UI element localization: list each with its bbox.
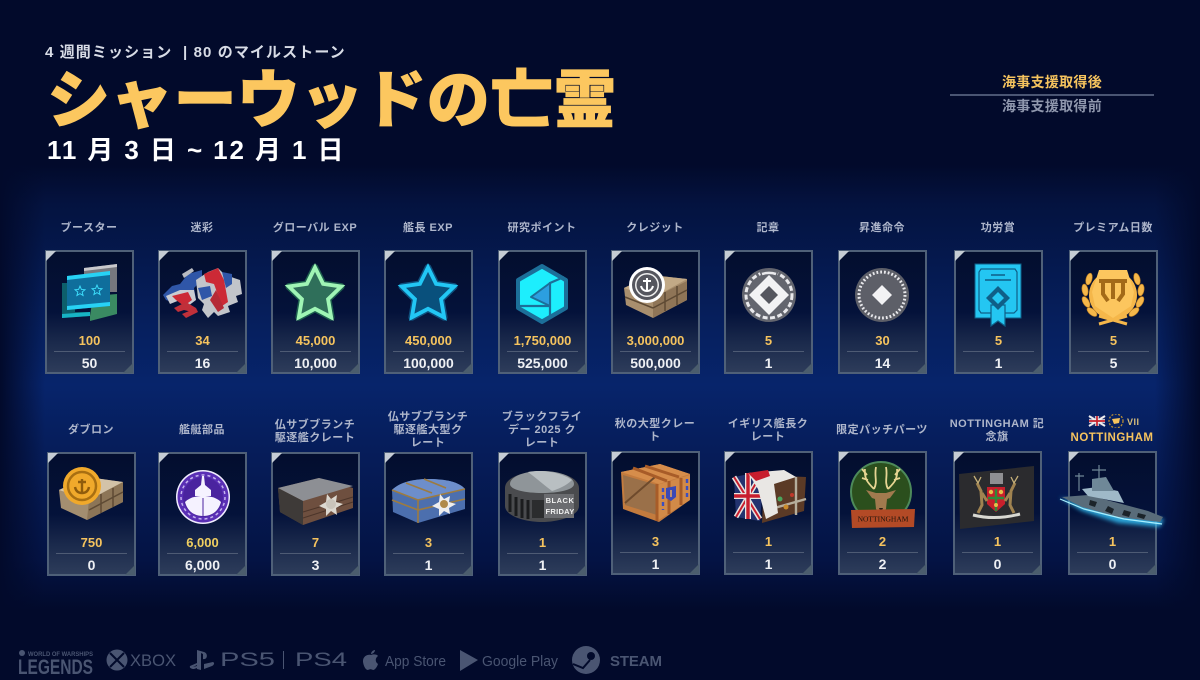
card <box>498 250 587 374</box>
before value: 1 <box>765 556 772 572</box>
label: ト <box>649 431 661 443</box>
before value: 1 <box>425 557 432 573</box>
logo: app store <box>363 650 446 670</box>
dates: 11 月 3 日 ~ 12 月 1 日 <box>47 135 345 165</box>
header block <box>45 44 617 165</box>
label: イギリス艦長ク <box>728 418 808 430</box>
icon: promotion order <box>855 268 909 322</box>
title: シャーウッドの亡霊 <box>47 66 617 136</box>
label <box>274 418 355 444</box>
label: 艦長 EXP <box>403 222 453 234</box>
after value: 1 <box>994 534 1001 549</box>
before value: 3 <box>312 557 319 573</box>
after value: 6,000 <box>186 535 219 550</box>
label: 限定パッチパーツ <box>836 424 928 436</box>
after value: 3 <box>425 535 432 550</box>
icon: blue chest <box>392 478 466 523</box>
nation and tier line: VII <box>1127 417 1140 427</box>
icon: laurel medal <box>742 268 796 322</box>
icon: black friday drum <box>505 471 579 522</box>
label: レート <box>411 437 445 449</box>
reward: limited patch parts <box>826 405 938 577</box>
logo: ps5 and ps4: PS4 <box>295 650 348 671</box>
reward: credits <box>611 222 700 374</box>
label <box>708 418 828 444</box>
legend <box>950 74 1154 114</box>
reward: nottingham commemorative flag <box>941 405 1053 577</box>
ship title block <box>1052 414 1172 448</box>
before value: 2 <box>879 556 886 572</box>
card <box>1069 250 1158 374</box>
icon: research hexagon <box>516 264 568 324</box>
label: クレジット <box>626 222 684 234</box>
card <box>954 250 1043 374</box>
logo: app store: App Store <box>385 653 446 670</box>
card <box>384 452 473 576</box>
reward: doubloons <box>47 423 136 576</box>
card <box>384 250 473 374</box>
logo: xbox <box>106 650 176 670</box>
icon: green star <box>284 263 346 321</box>
platform logos footer <box>0 640 680 680</box>
label: 駆逐艦クレート <box>275 432 355 444</box>
card <box>611 451 700 575</box>
label <box>615 418 695 443</box>
nation and tier line <box>1052 414 1172 428</box>
icon: nottingham flag <box>953 451 1041 575</box>
after value: 1,750,000 <box>514 333 571 348</box>
before value: 0 <box>88 557 95 573</box>
icon: gold laurel emblem <box>1082 270 1144 326</box>
logo: legends <box>18 650 94 679</box>
label: ダブロン <box>68 424 114 436</box>
label: 仏サブブランチ <box>275 419 355 431</box>
before value: 0 <box>994 556 1001 572</box>
reward: autumn large crate <box>611 418 700 575</box>
logo: legends: LEGENDS <box>18 656 93 679</box>
label: 迷彩 <box>190 222 214 234</box>
legend: after maritime support: 海事支援取得後 <box>1002 74 1102 90</box>
logo: xbox: XBOX <box>130 651 176 670</box>
reward: french destroyer large crate <box>384 410 473 576</box>
before value: 14 <box>875 355 890 371</box>
card <box>724 451 813 575</box>
after value: 750 <box>81 535 102 550</box>
before value: 10,000 <box>294 355 337 371</box>
icon: credit crate <box>624 267 688 318</box>
label: 駆逐艦大型ク <box>394 424 462 436</box>
reward: research points <box>498 222 587 374</box>
label: 昇進命令 <box>859 222 905 234</box>
reward: british commander crate <box>724 418 813 575</box>
reward: camouflage <box>158 222 247 374</box>
card <box>158 250 247 374</box>
before value: 5 <box>1110 355 1117 371</box>
card <box>953 451 1042 575</box>
after value: 3,000,000 <box>627 333 684 348</box>
before value: 500,000 <box>630 355 681 371</box>
icon: camouflage pattern <box>163 268 242 318</box>
after value: 100 <box>79 333 100 348</box>
label: 記章 <box>756 222 780 234</box>
legend divider <box>950 94 1154 96</box>
logo: ps5 and ps4: PS5 <box>220 650 275 671</box>
card <box>45 250 134 374</box>
card <box>724 250 813 374</box>
after value: 30 <box>875 333 890 348</box>
card <box>838 451 927 575</box>
logo: ps5 and ps4 <box>190 650 348 671</box>
logo: legends: WORLD OF WARSHIPS <box>28 651 94 658</box>
icon: stag patch: NOTTINGHAM <box>858 514 909 524</box>
label: 功労賞 <box>981 222 1015 234</box>
label: レート <box>525 437 559 449</box>
reward: promotion orders <box>838 222 927 374</box>
label: ブラックフライ <box>502 411 582 423</box>
before value: 1 <box>652 556 659 572</box>
card <box>1068 451 1157 575</box>
reward: nottingham ship <box>1056 405 1168 577</box>
after value: 2 <box>879 534 886 549</box>
after value: 1 <box>765 534 772 549</box>
reward: global exp <box>271 222 360 374</box>
label: NOTTINGHAM 記 <box>950 418 1044 430</box>
after value: 1 <box>539 535 546 550</box>
label: ブースター <box>61 222 117 234</box>
before value: 525,000 <box>517 355 568 371</box>
ship name: NOTTINGHAM <box>1071 432 1153 444</box>
reward: premium days <box>1069 222 1158 374</box>
reward: merit award <box>954 222 1043 374</box>
before value: 1 <box>765 355 772 371</box>
before value: 16 <box>195 355 210 371</box>
before value: 0 <box>1109 556 1116 572</box>
after value: 34 <box>195 333 210 348</box>
after value: 5 <box>995 333 1002 348</box>
card <box>271 250 360 374</box>
reward: booster <box>45 221 134 374</box>
icon: battleship <box>1068 451 1156 575</box>
reward: commander exp <box>384 222 473 374</box>
card <box>271 452 360 576</box>
icon: certificate <box>974 264 1022 327</box>
before value: 100,000 <box>403 355 454 371</box>
icon: black friday drum: BLACK <box>546 496 574 505</box>
label: プレミアム日数 <box>1073 222 1153 234</box>
label: 研究ポイント <box>508 222 576 234</box>
reward: ship parts <box>158 424 247 576</box>
label <box>937 418 1057 444</box>
icon: orange crate <box>621 464 690 522</box>
card <box>611 250 700 374</box>
after value: 45,000 <box>296 333 335 348</box>
logo: steam <box>572 646 662 674</box>
card <box>47 452 136 576</box>
subtitle: 4 週間ミッション <box>45 44 172 61</box>
after value: 3 <box>652 534 659 549</box>
after value: 7 <box>312 535 319 550</box>
icon: stag patch <box>838 451 926 575</box>
label: デー 2025 ク <box>508 424 576 436</box>
icon: doubloon crate <box>59 467 124 520</box>
label: 艦艇部品 <box>179 424 225 436</box>
before value: 6,000 <box>185 557 220 573</box>
logo: google play <box>460 650 558 671</box>
before value: 50 <box>82 355 97 371</box>
subtitle: | 80 のマイルストーン <box>183 44 346 61</box>
label <box>502 410 582 449</box>
before value: 1 <box>539 557 546 573</box>
icon: ship parts badge <box>176 470 230 524</box>
after value: 1 <box>1109 534 1116 549</box>
icon: booster flags <box>62 264 117 321</box>
icon: black friday drum: FRIDAY <box>545 507 575 516</box>
label: 念旗 <box>986 431 1008 443</box>
logo: google play: Google Play <box>482 653 558 670</box>
label: グローバル EXP <box>273 222 357 234</box>
legend: before maritime support: 海事支援取得前 <box>1002 98 1102 114</box>
card <box>498 452 587 576</box>
card <box>158 452 247 576</box>
after value: 5 <box>765 333 772 348</box>
before value: 1 <box>995 355 1002 371</box>
label <box>388 410 468 449</box>
label: 仏サブブランチ <box>388 411 468 423</box>
reward: black friday crate <box>498 410 587 576</box>
card <box>838 250 927 374</box>
after value: 5 <box>1110 333 1117 348</box>
label: レート <box>751 431 785 443</box>
icon: union flag crate <box>724 451 812 575</box>
logo: steam: STEAM <box>610 653 662 670</box>
after value: 450,000 <box>405 333 452 348</box>
icon: blue star <box>398 263 458 321</box>
subtitle <box>45 44 346 61</box>
reward: medals <box>724 222 813 374</box>
label: 秋の大型クレー <box>615 418 695 430</box>
icon: brown crate <box>278 478 354 525</box>
reward: french destroyer crate <box>271 418 360 576</box>
